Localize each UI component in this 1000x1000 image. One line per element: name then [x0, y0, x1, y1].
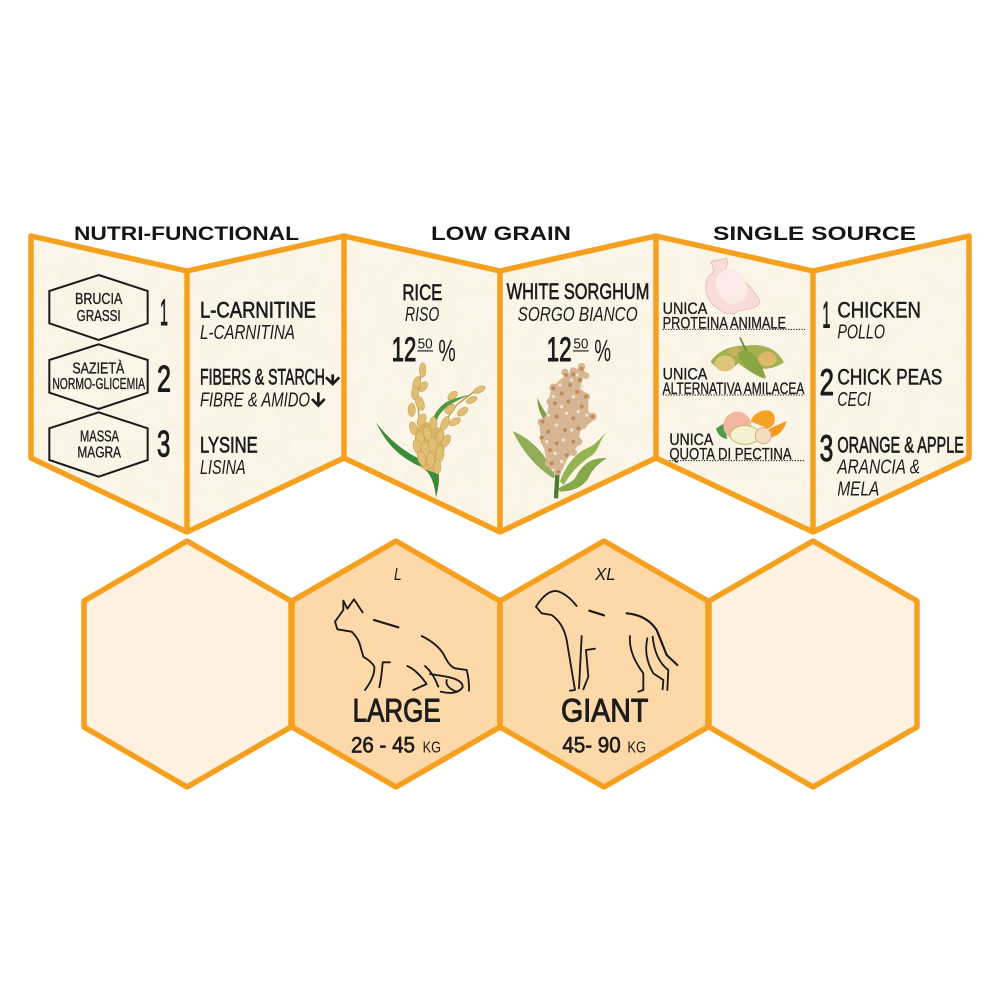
ingredient 1: chicken: 1: [822, 294, 830, 336]
panel: nutri-functional benefits: [49, 275, 171, 477]
folded leaflet background: [30, 235, 970, 533]
label giant: GIANT: [561, 692, 648, 729]
badge: massa magra: [49, 412, 148, 477]
rice percentage: [392, 331, 456, 369]
illustration: orange and apple: [716, 410, 787, 444]
rice label: [402, 280, 442, 326]
claim: unica quota di pectina: QUOTA DI PECTINA: [669, 444, 792, 463]
badge: brucia grassi: BRUCIA: [75, 291, 123, 308]
ingredient 3: orange and apple: MELA: [837, 478, 879, 501]
lysine text: LYSINE: [200, 433, 258, 458]
badge: brucia grassi: [49, 275, 148, 340]
badge: sazieta normo-glicemia: [49, 344, 148, 409]
rice percentage: 50: [418, 336, 433, 352]
claim: unica quota di pectina: [669, 430, 805, 463]
claim: unica proteina animale: [663, 299, 805, 332]
lysine text: [200, 433, 258, 479]
sorghum label: SORGO BIANCO: [518, 303, 638, 326]
l-carnitine text: L-CARNITINE: [200, 297, 316, 322]
illustration: chick peas: [711, 338, 784, 379]
hexagon: large size: [292, 541, 500, 787]
l-carnitine text: [200, 297, 316, 344]
ingredient 2: chick peas: [820, 362, 942, 411]
badge: massa magra: MAGRA: [77, 444, 122, 461]
rice percentage: %: [438, 334, 456, 368]
ingredient 3: orange and apple: ARANCIA &: [836, 455, 920, 478]
weight 45-90 kg: KG: [627, 740, 646, 757]
illustration: chicken: [706, 258, 760, 314]
weight 26-45 kg: KG: [423, 740, 441, 757]
weight 26-45 kg: 26 - 45: [351, 733, 415, 758]
illustration: rice plant: [376, 363, 486, 498]
fibers and starch text: [200, 364, 339, 412]
heading: nutri-functional: NUTRI-FUNCTIONAL: [74, 223, 299, 245]
claim: unica quota di pectina: UNICA: [669, 430, 714, 449]
l-carnitine text: L-CARNITINA: [200, 321, 295, 344]
sorghum percentage: [547, 331, 611, 369]
empty hexagon right: [709, 541, 917, 787]
sorghum label: [507, 279, 649, 326]
rice label: RICE: [402, 280, 442, 305]
badge: massa magra: MASSA: [80, 429, 120, 446]
ingredient 1: chicken: POLLO: [837, 320, 885, 343]
ingredient 3: orange and apple: 3: [820, 428, 833, 469]
number 3: 3: [157, 424, 170, 465]
panel: white sorghum: [507, 279, 649, 498]
panel: nutri-functional benefits: 1: [160, 291, 168, 333]
heading: single source: SINGLE SOURCE: [713, 223, 916, 245]
badge: brucia grassi: GRASSI: [77, 308, 121, 325]
rice percentage: 12: [392, 331, 416, 369]
weight 45-90 kg: 45- 90: [562, 733, 621, 758]
hexagon: giant size: [500, 541, 708, 787]
claim: unica alternativa amilacea: [663, 364, 805, 398]
label large: LARGE: [353, 692, 441, 729]
ingredient 2: chick peas: 2: [820, 362, 834, 403]
claim: unica alternativa amilacea: ALTERNATIVA AMILACEA: [663, 379, 805, 398]
lysine text: LISINA: [200, 456, 246, 479]
panel: functional ingredients: [200, 297, 339, 479]
panel: rice: [376, 280, 486, 498]
illustration: sorghum plant: [513, 363, 610, 498]
rice label: RISO: [405, 303, 439, 326]
sorghum percentage: %: [594, 334, 611, 368]
icon: large dog: [335, 599, 469, 693]
ingredient 2: chick peas: CHICK PEAS: [837, 364, 942, 389]
icon: giant dog: [536, 591, 677, 692]
sorghum percentage: 50: [573, 336, 588, 352]
badge: sazieta normo-glicemia: SAZIETÀ: [72, 360, 125, 377]
number 2: 2: [157, 359, 171, 400]
claim: unica alternativa amilacea: UNICA: [663, 364, 708, 383]
panel: single source claims: [663, 258, 805, 463]
sorghum label: WHITE SORGHUM: [507, 279, 649, 304]
size label l: L: [394, 564, 402, 584]
fibers and starch text: FIBERS & STARCH: [200, 364, 325, 389]
ingredient 1: chicken: [822, 294, 921, 343]
sorghum percentage: 12: [547, 331, 572, 369]
heading: low grain: LOW GRAIN: [431, 223, 571, 245]
panel: single source ingredients: [820, 294, 964, 501]
ingredient 2: chick peas: CECI: [837, 388, 871, 411]
empty hexagon left: [84, 541, 291, 787]
ingredient 1: chicken: CHICKEN: [837, 297, 921, 322]
claim: unica proteina animale: PROTEINA ANIMALE: [663, 313, 786, 332]
size label xl: XL: [594, 564, 616, 584]
ingredient 3: orange and apple: [820, 428, 964, 501]
fibers and starch text: FIBRE & AMIDO: [200, 389, 310, 412]
claim: unica proteina animale: UNICA: [663, 299, 708, 318]
badge: sazieta normo-glicemia: NORMO-GLICEMIA: [52, 376, 146, 393]
